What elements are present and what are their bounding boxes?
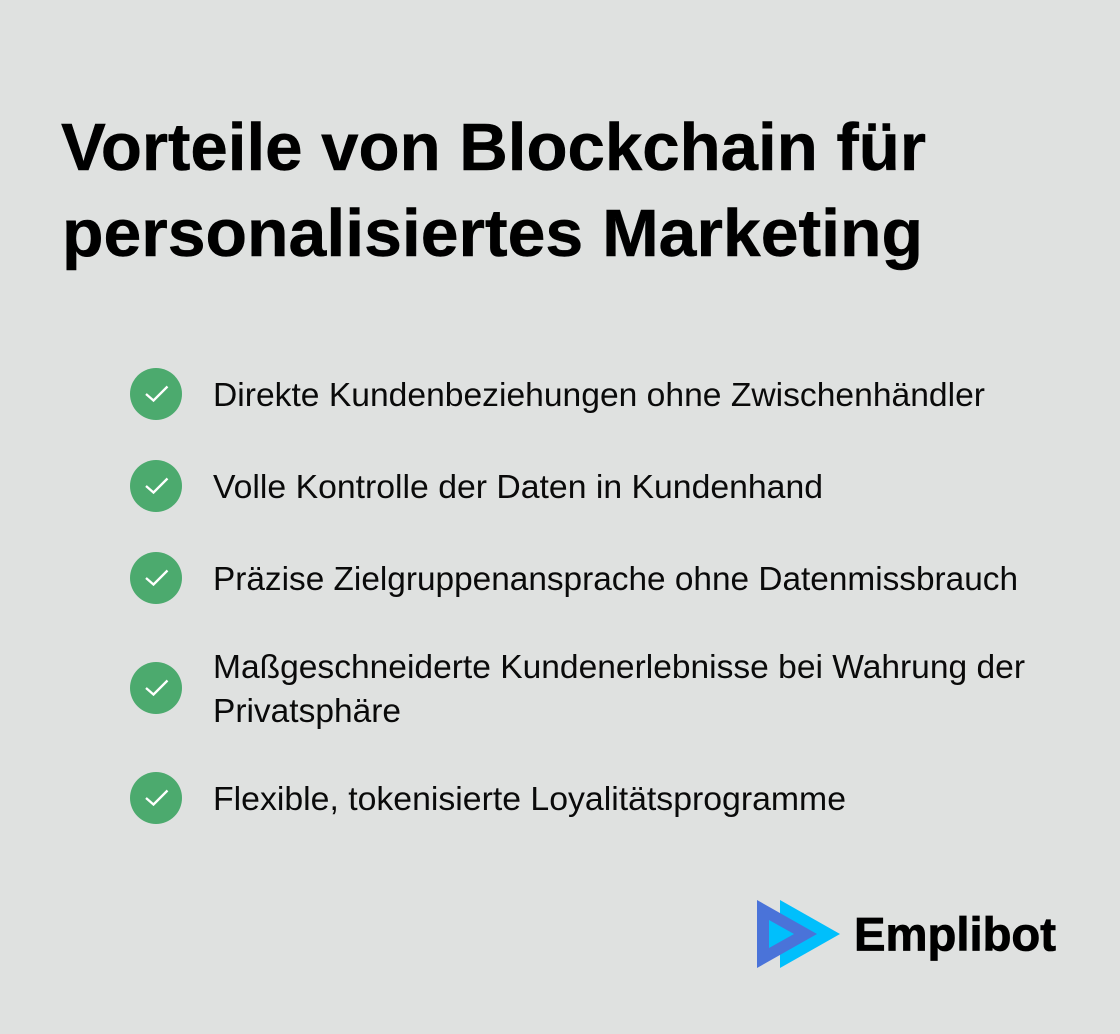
title: personalisiertes Marketing [62,196,923,271]
logo wordmark: Emplibot [854,908,1056,960]
item 1 [130,368,985,420]
title [61,110,926,271]
item 3: Präzise Zielgruppenansprache ohne Datenmissbrauch [213,561,1018,598]
item 5: Flexible, tokenisierte Loyalitätsprogramme [213,781,846,818]
item 4: Privatsphäre [213,693,401,730]
item 2: Volle Kontrolle der Daten in Kundenhand [213,469,823,506]
title: Vorteile von Blockchain für [61,110,926,185]
logo: Emplibot [757,900,1056,968]
item 3 [130,552,1018,604]
benefits list [130,368,1025,824]
item 4 [130,649,1025,730]
item 1: Direkte Kundenbeziehungen ohne Zwischenhändler [213,377,985,414]
item 5 [130,772,846,824]
icon: play triangles [757,900,840,968]
item 4: Maßgeschneiderte Kundenerlebnisse bei Wahrung der [213,649,1025,686]
item 2 [130,460,823,512]
